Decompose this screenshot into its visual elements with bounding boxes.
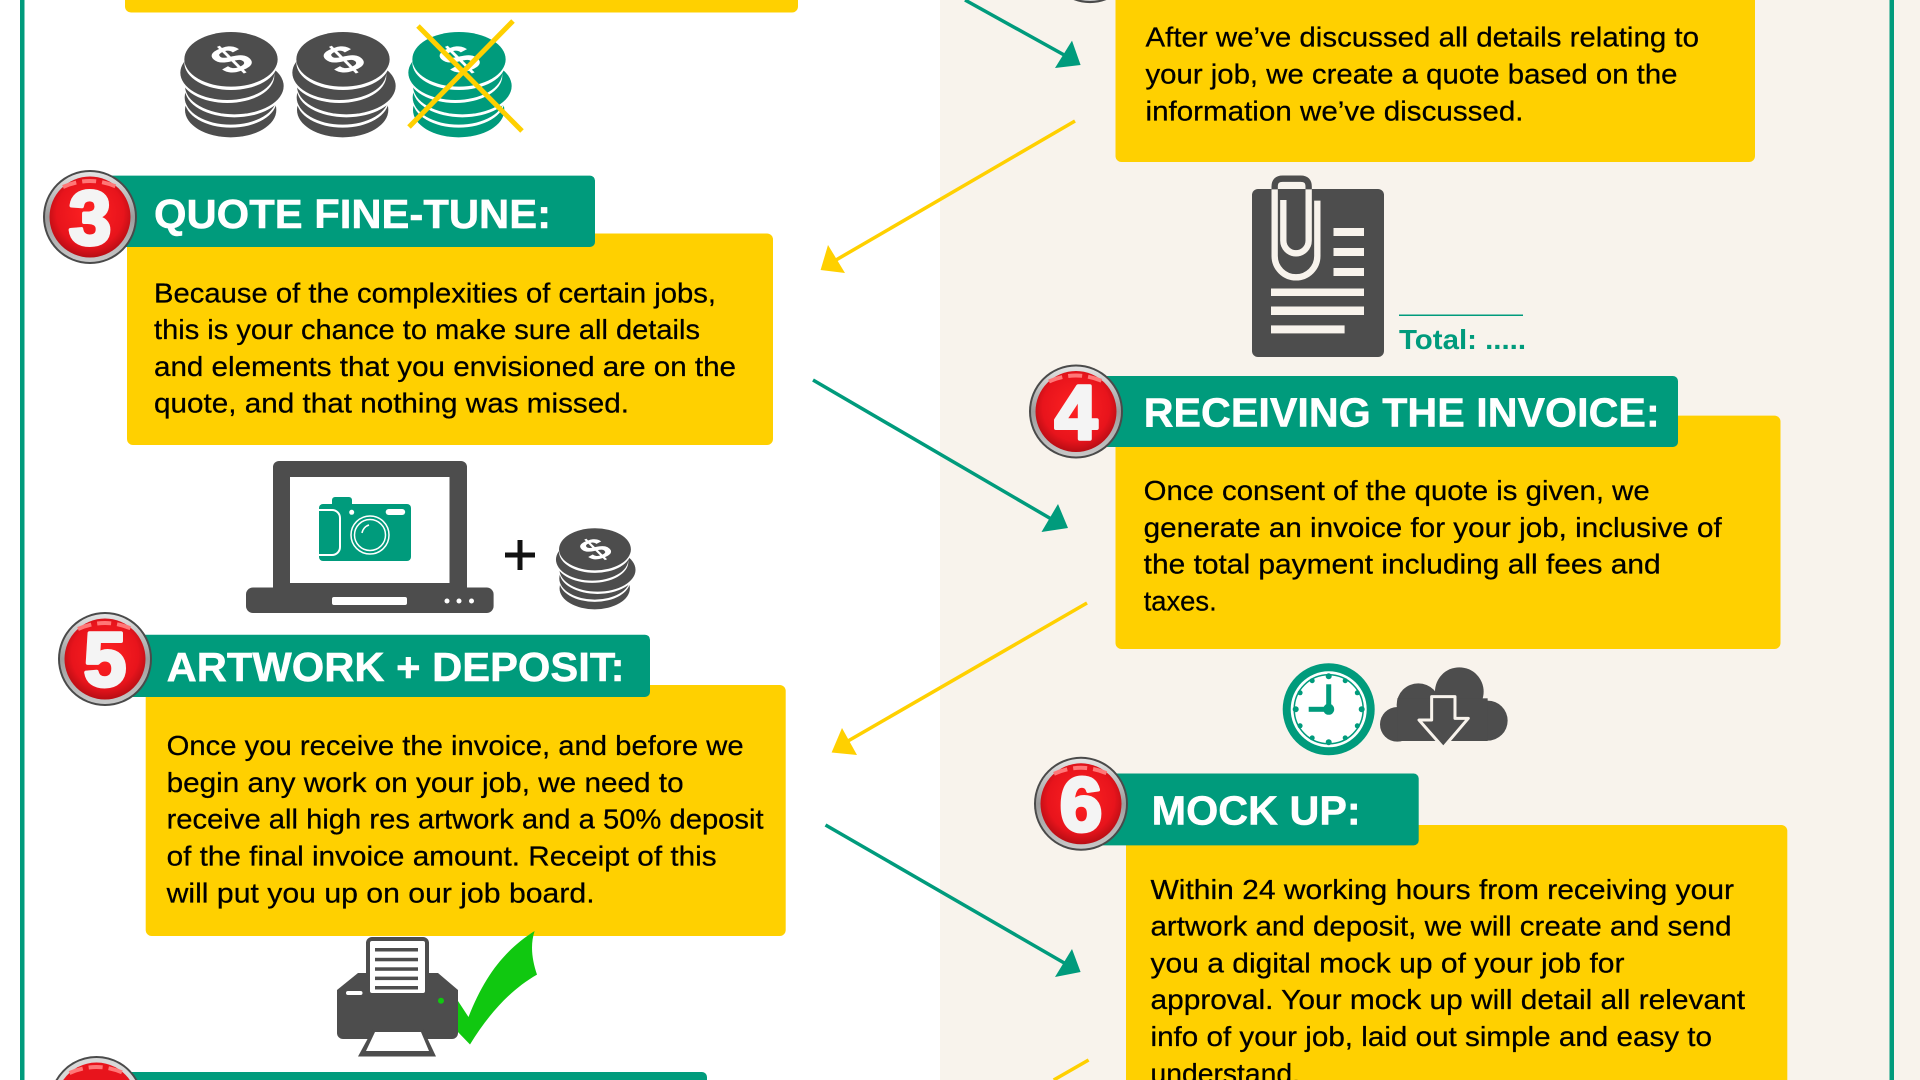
step 2 text box: After we’ve discussed all details relating to: [1146, 22, 1699, 52]
icon: clock: [1283, 663, 1375, 755]
arrow: step 6 onward (cropped): [1054, 1060, 1089, 1080]
icon: coin stack 1: $: [198, 35, 264, 83]
step 6 text box: you a digital mock up of your job for: [1150, 948, 1624, 978]
step 5 text box: will put you up on our job board.: [166, 877, 595, 908]
step 4 heading: [1090, 376, 1678, 447]
step 3 heading: QUOTE FINE-TUNE:: [154, 191, 551, 237]
step 5 number badge: 5: [84, 618, 126, 703]
step 2 text box: your job, we create a quote based on the: [1146, 59, 1678, 90]
step 3 text box: and elements that you envisioned are on the: [154, 351, 736, 382]
arrow: step 1 to step 2: [965, 0, 1081, 68]
icon: printer: [337, 939, 458, 1056]
step 6 heading: MOCK UP:: [1152, 787, 1361, 833]
step 4 text box: the total payment including all fees and: [1144, 549, 1661, 580]
step 5 text box: begin any work on your job, we need to: [167, 767, 684, 798]
step 2 text box: information we’ve discussed.: [1146, 96, 1524, 126]
step 3 heading: [100, 176, 595, 247]
icon: green check mark: [456, 931, 537, 1044]
step 5 text box: [146, 685, 786, 936]
icon: small coin stack: $: [570, 531, 621, 568]
step 3 text box: Because of the complexities of certain jobs,: [154, 277, 716, 308]
step 7 heading bar (cropped): [120, 1072, 707, 1080]
step 6 number badge: [1034, 757, 1128, 851]
step 4 number badge: 4: [1055, 370, 1097, 456]
icon: crossed-out green coin stack: $: [426, 35, 492, 83]
step 3 text box: [127, 234, 773, 445]
arrow: step 4 to step 5: [832, 603, 1087, 755]
icon: cloud download: [1380, 667, 1508, 748]
plus sign: [505, 540, 535, 570]
step 3 number badge: [43, 170, 137, 264]
step 2 text box: [1116, 0, 1755, 162]
step 4 text box: generate an invoice for your job, inclusive of: [1144, 512, 1722, 543]
icon: coin stack 2: [292, 32, 396, 137]
icon: camera: [319, 497, 411, 561]
step 4 text box: [1116, 416, 1780, 649]
panel: step 1 text box (cropped): [125, 0, 798, 12]
icon: coin stack 1: [180, 32, 284, 137]
step 6 number badge: 6: [1060, 763, 1102, 848]
step 6 text box: [1126, 825, 1787, 1080]
icon: small coin stack: [556, 528, 636, 609]
step 6 text box: Within 24 working hours from receiving your: [1150, 874, 1734, 905]
step 5 text box: Once you receive the invoice, and before we: [167, 730, 744, 761]
step 6 heading: [1095, 774, 1419, 845]
icon: coin stack 2: $: [310, 35, 376, 83]
step 5 text box: of the final invoice amount. Receipt of this: [167, 840, 717, 871]
step 4 text box: Once consent of the quote is given, we: [1144, 475, 1650, 506]
icon: laptop with camera: [246, 461, 494, 613]
step 5 heading: ARTWORK + DEPOSIT:: [167, 644, 625, 690]
icon: quote document with paperclip: [1252, 179, 1384, 357]
right frame border: [1890, 0, 1894, 1080]
step 4 number badge: [1029, 364, 1123, 458]
icon: crossed-out green coin stack: [408, 21, 522, 137]
step 2 number badge (cropped): [1074, 0, 1106, 3]
step 6 text box: approval. Your mock up will detail all relevant: [1150, 984, 1745, 1015]
left frame border: [20, 0, 24, 1080]
panel: right column background: [940, 0, 1920, 1080]
step 3 text box: this is your chance to make sure all details: [154, 314, 700, 345]
step 5 heading: [115, 635, 650, 697]
step 3 text box: quote, and that nothing was missed.: [154, 388, 629, 418]
step 3 number badge: 3: [69, 176, 111, 261]
arrow: step 2 to step 3: [821, 121, 1075, 273]
step 5 text box: receive all high res artwork and a 50% deposit: [167, 804, 764, 835]
arrow: step 5 to step 6: [826, 825, 1081, 977]
step 4 text box: taxes.: [1144, 586, 1217, 617]
arrow: step 3 to step 4: [813, 380, 1068, 532]
step 4 heading: RECEIVING THE INVOICE:: [1144, 389, 1660, 435]
step 6 text box: artwork and deposit, we will create and send: [1150, 910, 1732, 941]
quote total label: Total: .....: [1399, 324, 1526, 355]
step 5 number badge: [58, 612, 152, 706]
step 6 text box: info of your job, laid out simple and easy to: [1150, 1021, 1712, 1052]
step 7 number badge (cropped): [56, 1056, 138, 1080]
